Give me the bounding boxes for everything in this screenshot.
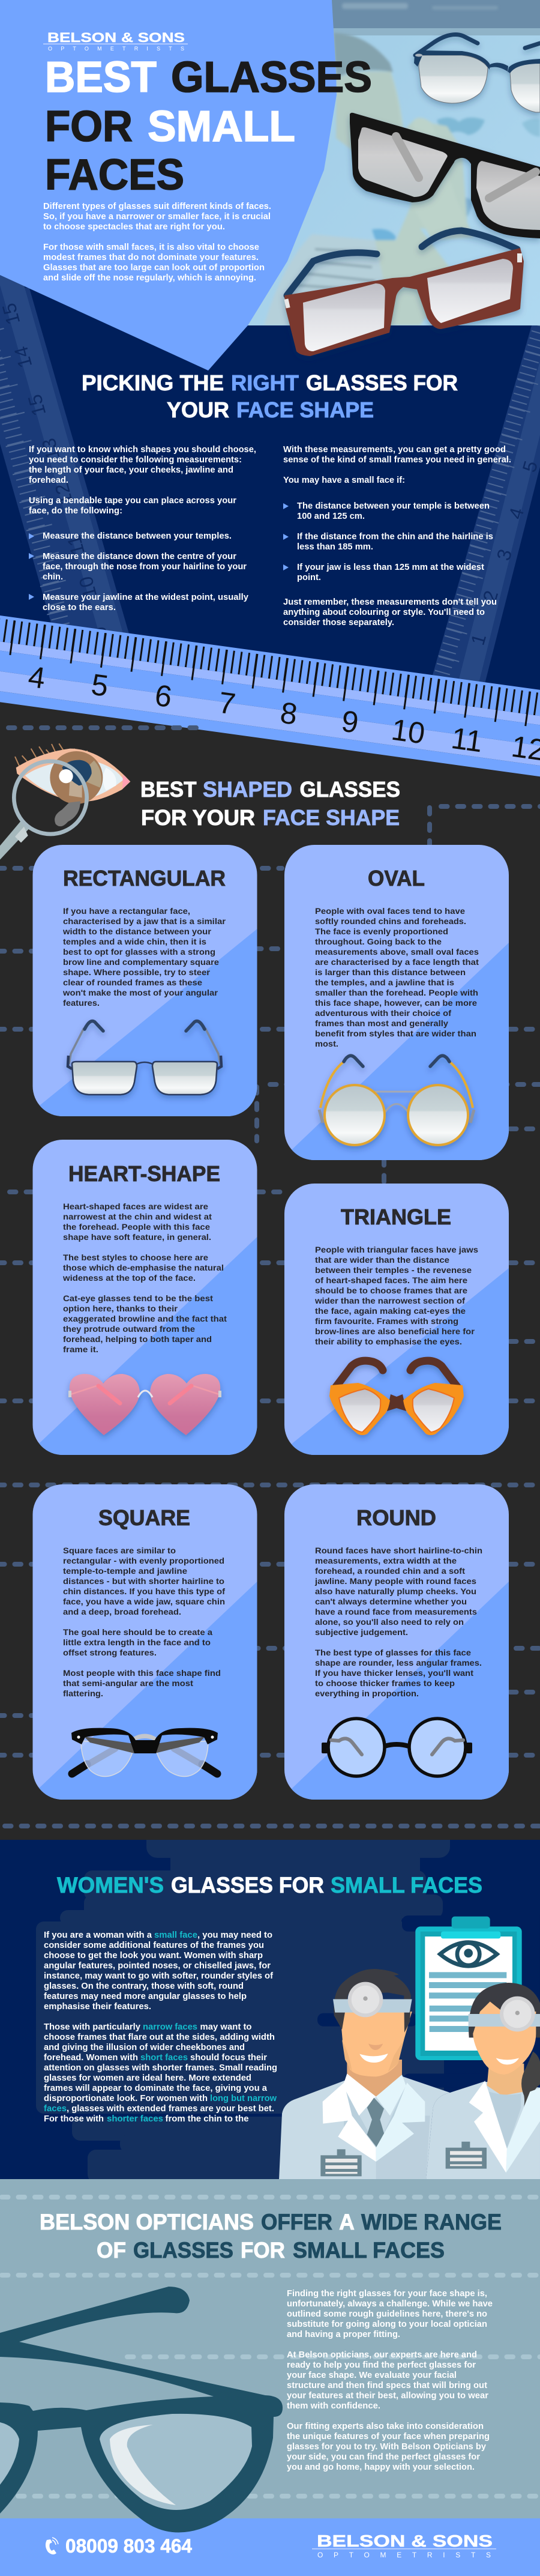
text: oval: is larger than this distance between xyxy=(315,967,466,977)
title: picking the right glasses: PICKING THE xyxy=(82,370,224,395)
text block: measuring guide: face, do the following: xyxy=(29,506,122,516)
title: picking the right glasses xyxy=(82,370,458,422)
text: heart-shape: wideness at the top of the face. xyxy=(62,1273,196,1283)
text: round: can't always determine whether you xyxy=(315,1597,467,1606)
ruler numbers: 5 xyxy=(89,668,110,703)
title: main: GLASSES xyxy=(171,53,372,101)
text: rectangular: clear of rounded frames as these xyxy=(63,978,202,987)
text: round: shape are rounder, less angular frames. xyxy=(315,1658,482,1667)
ruler numbers: 9 xyxy=(340,704,361,740)
text: heart-shape: the forehead. People with this face xyxy=(63,1222,210,1232)
text block: women's advice xyxy=(44,1930,277,2124)
hero intro text: Glasses that are too large can look out of proportion xyxy=(43,263,265,273)
text block: women's advice: glasses for women are ideal here. More extended xyxy=(44,2073,251,2083)
text: round: also have naturally plump cheeks. You xyxy=(315,1586,476,1596)
text block: women's advice: , you may need to xyxy=(197,1930,272,1940)
text: square: and a deep, broad forehead. xyxy=(63,1607,181,1616)
text: oval: throughout. Going back to the xyxy=(315,937,442,946)
text block: measuring guide: Measure the distance down the centre of your xyxy=(43,552,236,561)
text: oval xyxy=(315,906,479,1048)
heading: round: ROUND xyxy=(356,1505,436,1530)
heading: rectangular: RECTANGULAR xyxy=(63,866,226,890)
text block: women's advice: emphasise their features. xyxy=(44,2002,151,2012)
title: best shaped glasses: FOR YOUR xyxy=(141,805,255,830)
text: round: jawline. Many people with round faces xyxy=(314,1576,476,1586)
decorative dashed rows xyxy=(0,728,540,1826)
text block: women's advice: If you are a woman with a xyxy=(44,1930,152,1940)
text block: small face criteria: sense of the kind of small frames you need in general. xyxy=(283,455,511,465)
text block: belson opticians: substitute for going along to your local optician xyxy=(287,2320,487,2329)
logo: footer: BELSON & SONS xyxy=(317,2532,493,2550)
text: round xyxy=(314,1546,482,1698)
title: main: FACES xyxy=(45,151,184,199)
title: best shaped glasses xyxy=(140,777,400,830)
hero photo xyxy=(240,0,540,325)
text block: small face criteria: consider those separately. xyxy=(283,618,394,627)
background ruler: left xyxy=(0,264,135,655)
text: triangle: the face, again making cat-eyes the xyxy=(315,1306,466,1316)
title: picking the right glasses: RIGHT xyxy=(231,370,299,395)
ruler numbers: 7 xyxy=(217,686,238,721)
text block: women's advice: from the chin to the xyxy=(166,2114,248,2124)
hero intro text: For those with small faces, it is also vital to choose xyxy=(43,243,259,252)
logo: header: BELSON & SONS xyxy=(47,30,185,45)
text block: belson opticians: unfortunately, always a challenge. While we have xyxy=(287,2299,493,2309)
optician: man xyxy=(279,1969,450,2180)
text: oval: are characterised by a face length that xyxy=(315,957,479,967)
title: best shaped glasses: GLASSES xyxy=(300,777,400,802)
text: square: flattering. xyxy=(63,1689,103,1698)
text block: measuring guide: face, through the nose from your hairline to your xyxy=(43,562,247,572)
text: triangle: their ability to emphasise the eyes. xyxy=(315,1337,462,1346)
text block: small face criteria xyxy=(283,445,511,627)
text block: women's advice: instance, may want to go with softer, rounder styles of xyxy=(44,1971,273,1981)
text: oval: measurements above, small oval faces xyxy=(315,947,479,957)
text block: women's advice: short faces xyxy=(140,2053,188,2063)
glasses: navy half-rim xyxy=(414,35,540,112)
card: square xyxy=(24,1484,257,1800)
background ruler: left: 15 xyxy=(23,392,50,419)
text block: women's advice: forehead. Women with xyxy=(44,2053,138,2063)
text: oval: smaller than the forehead. People with xyxy=(315,988,478,997)
text: heart-shape xyxy=(62,1202,227,1354)
text block: measuring guide: you need to consider the following measurements: xyxy=(29,455,242,465)
text block: women's advice: long but narrow xyxy=(210,2094,277,2103)
text: rectangular: temples and a wide chin, then it is xyxy=(63,937,206,946)
text block: belson opticians: them with confidence. xyxy=(287,2401,380,2411)
title: best shaped glasses: BEST xyxy=(140,777,197,802)
hero intro text: modest frames that do not dominate your features. xyxy=(43,253,259,262)
ruler numbers: 8 xyxy=(278,696,299,731)
text: triangle: should be to choose frames that are xyxy=(315,1286,467,1295)
ruler numbers: 11 xyxy=(449,721,485,758)
background ruler: left: 9 xyxy=(88,624,112,640)
text: round: alone, so you'll also need to rely on xyxy=(315,1617,464,1627)
background ruler: right xyxy=(425,325,540,703)
ruler numbers: 10 xyxy=(389,713,427,751)
card: round xyxy=(282,1484,509,1800)
title: belson opticians: SMALL FACES xyxy=(293,2238,445,2263)
text: oval: benefit from styles that are wider than xyxy=(315,1029,476,1038)
text block: women's advice: narrow faces xyxy=(143,2022,197,2032)
section background: belson opticians xyxy=(0,2179,540,2518)
text block: women's advice: Those with particularly xyxy=(44,2022,140,2032)
card: rectangular xyxy=(24,845,257,1117)
illustration: large glasses xyxy=(0,2287,283,2533)
clipboard xyxy=(415,1917,522,2060)
text: triangle: between their temples - the revenese xyxy=(315,1265,472,1275)
title: belson opticians: A xyxy=(339,2210,355,2234)
background ruler: left: 11 xyxy=(63,533,89,558)
text: square: Most people with this face shape find xyxy=(63,1668,221,1678)
text block: small face criteria: With these measurements, you can get a pretty good xyxy=(283,445,506,455)
hero intro text: to choose spectacles that are right for you. xyxy=(43,222,225,232)
hero blue panel xyxy=(0,0,337,370)
section background: women's glasses xyxy=(0,1825,540,2183)
text block: measuring guide: Measure the distance between your temples. xyxy=(43,531,232,541)
text block: belson opticians: structure and then find specs that will bring out xyxy=(287,2381,487,2390)
text: triangle: that are wider than the distance xyxy=(315,1255,449,1265)
text block: small face criteria: If the distance from the chin and the hairline is xyxy=(297,532,493,542)
text: triangle xyxy=(314,1245,478,1346)
text block: women's advice: should focus their xyxy=(190,2053,267,2063)
text block: women's advice: angular features, pointed noses, or chiselled jaws, for xyxy=(44,1961,271,1971)
text block: women's advice: small face xyxy=(154,1930,197,1940)
text: heart-shape: those which de-emphasise the natural xyxy=(63,1263,224,1272)
background ruler: left: 14 xyxy=(10,344,36,370)
text block: small face criteria: 100 and 125 cm. xyxy=(297,512,365,521)
text block: belson opticians: and having a proper fitting. xyxy=(287,2330,400,2339)
text block: belson opticians: outlined some rough guidelines here, there's no xyxy=(287,2309,487,2319)
text block: women's advice: choose to get the look you want. Women with sharp xyxy=(44,1951,263,1961)
text: square: offset strong features. xyxy=(63,1648,157,1657)
text: rectangular: characterised by a jaw that is a similar xyxy=(63,916,226,926)
title: women's glasses: SMALL FACES xyxy=(331,1873,482,1897)
title: main xyxy=(45,53,372,199)
glasses: rectangular xyxy=(68,1021,221,1095)
text block: women's advice: and giving the illusion of wider cheekbones and xyxy=(44,2043,245,2052)
text: square: chin distances. If you have this type of xyxy=(63,1586,225,1596)
glasses: round xyxy=(322,1719,472,1776)
ruler numbers xyxy=(26,660,540,767)
glasses: black square frame xyxy=(350,113,540,238)
logo: header xyxy=(43,30,188,52)
text block: women's advice: disproportionate look. For women with xyxy=(44,2094,208,2103)
card: oval xyxy=(282,845,509,1161)
text block: small face criteria: The distance between your temple is between xyxy=(297,501,490,511)
text block: women's advice: may want to xyxy=(200,2022,252,2032)
title: belson opticians: FOR xyxy=(241,2238,285,2263)
text block: women's advice: shorter faces xyxy=(107,2114,163,2124)
text: rectangular: If you have a rectangular face, xyxy=(63,906,190,916)
heading: oval: OVAL xyxy=(368,866,425,890)
text: oval: this face shape, however, can be more xyxy=(315,998,477,1008)
text: heart-shape: Cat-eye glasses tend to be the best xyxy=(63,1293,213,1303)
background ruler: left: 10 xyxy=(74,574,101,600)
text: heart-shape: frame it. xyxy=(63,1344,98,1354)
card: heart-shape xyxy=(24,1140,257,1456)
background ruler: right: 2 xyxy=(479,588,502,604)
text block: belson opticians xyxy=(287,2289,493,2472)
text: heart-shape: shape have soft feature, in general. xyxy=(63,1232,211,1242)
text: triangle: of heart-shaped faces. The aim here xyxy=(315,1275,467,1285)
optician: woman xyxy=(426,1983,540,2180)
navy background: hero bottom and picking section xyxy=(0,240,540,781)
text: square: Square faces are similar to xyxy=(63,1546,176,1555)
background ruler: right: 1 xyxy=(467,631,490,647)
text: oval: adventurous with their choice of xyxy=(315,1008,451,1018)
text block: belson opticians: the unique features of your face when preparing xyxy=(287,2432,490,2441)
glasses: brown frame xyxy=(284,231,524,356)
background ruler: left: 13 xyxy=(37,436,64,462)
dashes: belson section xyxy=(2,2197,540,2496)
title: main: FOR xyxy=(45,103,133,151)
text: heart-shape: option here, thanks to their xyxy=(63,1304,178,1313)
title: belson opticians: WIDE RANGE xyxy=(361,2210,502,2234)
text: square: little extra length in the face and to xyxy=(63,1637,211,1647)
text block: measuring guide: Measure your jawline at the widest point, usually xyxy=(43,593,248,602)
text block: small face criteria: anything about colouring or style. You'll need to xyxy=(283,608,485,617)
text: heart-shape: they protrude outward from the xyxy=(63,1324,195,1334)
text: heart-shape: The best styles to choose here are xyxy=(63,1253,208,1262)
text block: small face criteria: If your jaw is less than 125 mm at the widest xyxy=(297,563,484,572)
text: rectangular: features. xyxy=(63,998,100,1008)
text: triangle: People with triangular faces have jaws xyxy=(315,1245,478,1254)
text: square: distances - but with shorter hairline to xyxy=(63,1576,224,1586)
ruler numbers: 6 xyxy=(153,679,174,714)
glasses: oval xyxy=(319,1056,474,1145)
text: round: measurements, extra width at the xyxy=(315,1556,457,1565)
title: belson opticians: OFFER xyxy=(261,2210,332,2234)
text block: measuring guide: Using a bendable tape you can place across your xyxy=(29,496,236,506)
text block: women's advice: attention on glasses with shorter frames. Small reading xyxy=(44,2063,277,2073)
title: main: BEST xyxy=(45,53,157,101)
text: triangle: wider than the narrowest section of xyxy=(314,1296,465,1305)
text block: belson opticians: At Belson opticians, our experts are here and xyxy=(287,2350,477,2360)
illustration: eye and magnifier xyxy=(0,743,130,860)
title: picking the right glasses: GLASSES FOR xyxy=(306,370,458,395)
text block: women's advice: glasses. On the contrary, those with soft, round xyxy=(44,1982,244,1991)
text block: belson opticians: Our fitting experts also take into consideration xyxy=(287,2422,484,2431)
text: oval: softly rounded chins and foreheads. xyxy=(315,916,466,926)
background ruler: right: 4 xyxy=(505,505,528,521)
text block: measuring guide: chin. xyxy=(43,572,63,582)
logo: footer: OPTOMETRISTS xyxy=(317,2551,491,2559)
text block: belson opticians: glasses for you to try. With Belson Opticians by xyxy=(287,2442,486,2452)
title: picking the right glasses: FACE SHAPE xyxy=(236,398,374,422)
text block: women's advice: features may need more angular glasses to help xyxy=(44,1992,247,2001)
text block: belson opticians: your side, you can find the perfect glasses for xyxy=(287,2452,480,2462)
hero intro text xyxy=(43,202,271,283)
text block: belson opticians: your features at their best, allowing you to wear xyxy=(287,2391,488,2401)
text block: small face criteria: point. xyxy=(297,573,321,582)
text block: women's advice: frames will appear to dominate the face, giving you a xyxy=(44,2084,268,2093)
measuring ruler xyxy=(0,611,540,786)
text block: measuring guide: close to the ears. xyxy=(43,603,116,612)
text block: belson opticians: you and go home, happy with your selection. xyxy=(287,2463,475,2472)
title: main: SMALL xyxy=(148,103,295,151)
text: square: that semi-angular are the most xyxy=(63,1678,193,1688)
text block: women's advice: faces xyxy=(44,2104,67,2114)
hero intro text: Different types of glasses suit different kinds of faces. xyxy=(43,202,271,211)
text: round: Round faces have short hairline-to-chin xyxy=(315,1546,482,1555)
glasses: heart-shape xyxy=(68,1374,221,1435)
title: best shaped glasses: SHAPED xyxy=(203,777,292,802)
illustration: opticians and clipboard xyxy=(279,1915,540,2180)
text: rectangular: shape. Where possible, try to steer xyxy=(63,967,211,977)
text: round: have a round face from measurements xyxy=(315,1607,477,1616)
hero intro text: So, if you have a narrower or smaller face, it is crucial xyxy=(43,212,271,222)
dark section background xyxy=(0,691,540,1840)
logo: footer xyxy=(312,2532,496,2559)
glasses: square xyxy=(71,1728,218,1777)
text: oval: most. xyxy=(315,1039,338,1048)
background ruler: left: 12 xyxy=(50,481,77,507)
text: triangle: brow-lines are also beneficial here for xyxy=(315,1326,475,1336)
text block: belson opticians: ready to help you find the perfect glasses for xyxy=(287,2360,476,2370)
text: oval: People with oval faces tend to have xyxy=(315,906,465,916)
heading: square: SQUARE xyxy=(98,1505,190,1530)
text block: measuring guide xyxy=(29,445,256,612)
text: rectangular: won't make the most of your angular xyxy=(62,988,218,997)
heading: triangle: TRIANGLE xyxy=(341,1205,451,1229)
text block: small face criteria: Just remember, these measurements don't tell you xyxy=(283,597,497,607)
text: square xyxy=(63,1546,225,1698)
text: round: everything in proportion. xyxy=(315,1689,419,1698)
heading: heart-shape: HEART-SHAPE xyxy=(68,1161,220,1186)
text block: women's advice: For those with xyxy=(44,2114,104,2124)
card: triangle xyxy=(282,1184,509,1456)
text block: measuring guide: the length of your face, your cheeks, jawline and xyxy=(29,465,233,475)
text: heart-shape: narrowest at the chin and widest at xyxy=(63,1212,212,1221)
text block: women's advice: consider some additional features of the frames you xyxy=(44,1941,264,1950)
footer band xyxy=(0,2518,540,2576)
phone number: 08009 803 464 xyxy=(65,2535,192,2557)
text block: small face criteria: less than 185 mm. xyxy=(297,542,373,552)
text: heart-shape: exaggerated browline and the fact that xyxy=(63,1314,227,1323)
title: women's glasses xyxy=(57,1873,482,1897)
text: round: to choose thicker frames to keep xyxy=(315,1678,455,1688)
text: rectangular: brow line and complementary square xyxy=(63,957,219,967)
text block: belson opticians: Finding the right glasses for your face shape is, xyxy=(287,2289,487,2299)
title: belson opticians: GLASSES xyxy=(133,2238,233,2263)
title: belson opticians: BELSON OPTICIANS xyxy=(40,2210,254,2234)
logo: header: OPTOMETRISTS xyxy=(48,46,184,52)
title: picking the right glasses: YOUR xyxy=(167,398,229,422)
text block: women's advice: , glasses with extended frames are your best bet. xyxy=(67,2104,274,2114)
text: oval: The face is evenly proportioned xyxy=(315,927,448,936)
text block: belson opticians: your face shape. We evaluate your facial xyxy=(287,2371,457,2380)
text: square: temple-to-temple and jawline xyxy=(63,1566,187,1576)
ruler numbers: 4 xyxy=(26,660,47,695)
text block: measuring guide: forehead. xyxy=(29,476,68,485)
text: heart-shape: Heart-shaped faces are widest are xyxy=(63,1202,208,1211)
text block: measuring guide: If you want to know which shapes you should choose, xyxy=(29,445,256,455)
text: round: subjective judgement. xyxy=(315,1627,408,1637)
text: rectangular: best to opt for glasses with a strong xyxy=(63,947,215,957)
text: heart-shape: forehead, helping to both taper and xyxy=(63,1334,212,1344)
text: rectangular xyxy=(62,906,226,1008)
text: round: The best type of glasses for this face xyxy=(315,1648,471,1657)
text: round: If you have thicker lenses, you'll want xyxy=(315,1668,473,1678)
background ruler: right: 3 xyxy=(493,546,516,563)
text: oval: frames than most and generally xyxy=(315,1018,448,1028)
title: women's glasses: WOMEN'S xyxy=(57,1873,164,1897)
text: square: face, you have a wide jaw, square chin xyxy=(63,1597,225,1606)
title: women's glasses: GLASSES FOR xyxy=(171,1873,324,1897)
text: triangle: firm favourite. Frames with strong xyxy=(315,1316,458,1326)
text: round: forehead, a rounded chin and a soft xyxy=(315,1566,465,1576)
text block: women's advice: choose frames that flare out at the sides, adding width xyxy=(44,2033,275,2042)
hero intro text: and slide off the nose regularly, which is annoying. xyxy=(43,273,256,283)
text: oval: the temples, and a jawline that is xyxy=(315,978,454,987)
glasses: triangle xyxy=(329,1361,464,1435)
text block: small face criteria: You may have a small face if: xyxy=(283,476,405,485)
title: belson opticians xyxy=(40,2210,502,2263)
title: belson opticians: OF xyxy=(97,2238,126,2263)
text: rectangular: width to the distance between your xyxy=(62,927,212,936)
text: square: rectangular - with evenly proportioned xyxy=(63,1556,224,1565)
text: square: The goal here should be to create a xyxy=(63,1627,212,1637)
title: best shaped glasses: FACE SHAPE xyxy=(263,805,400,830)
